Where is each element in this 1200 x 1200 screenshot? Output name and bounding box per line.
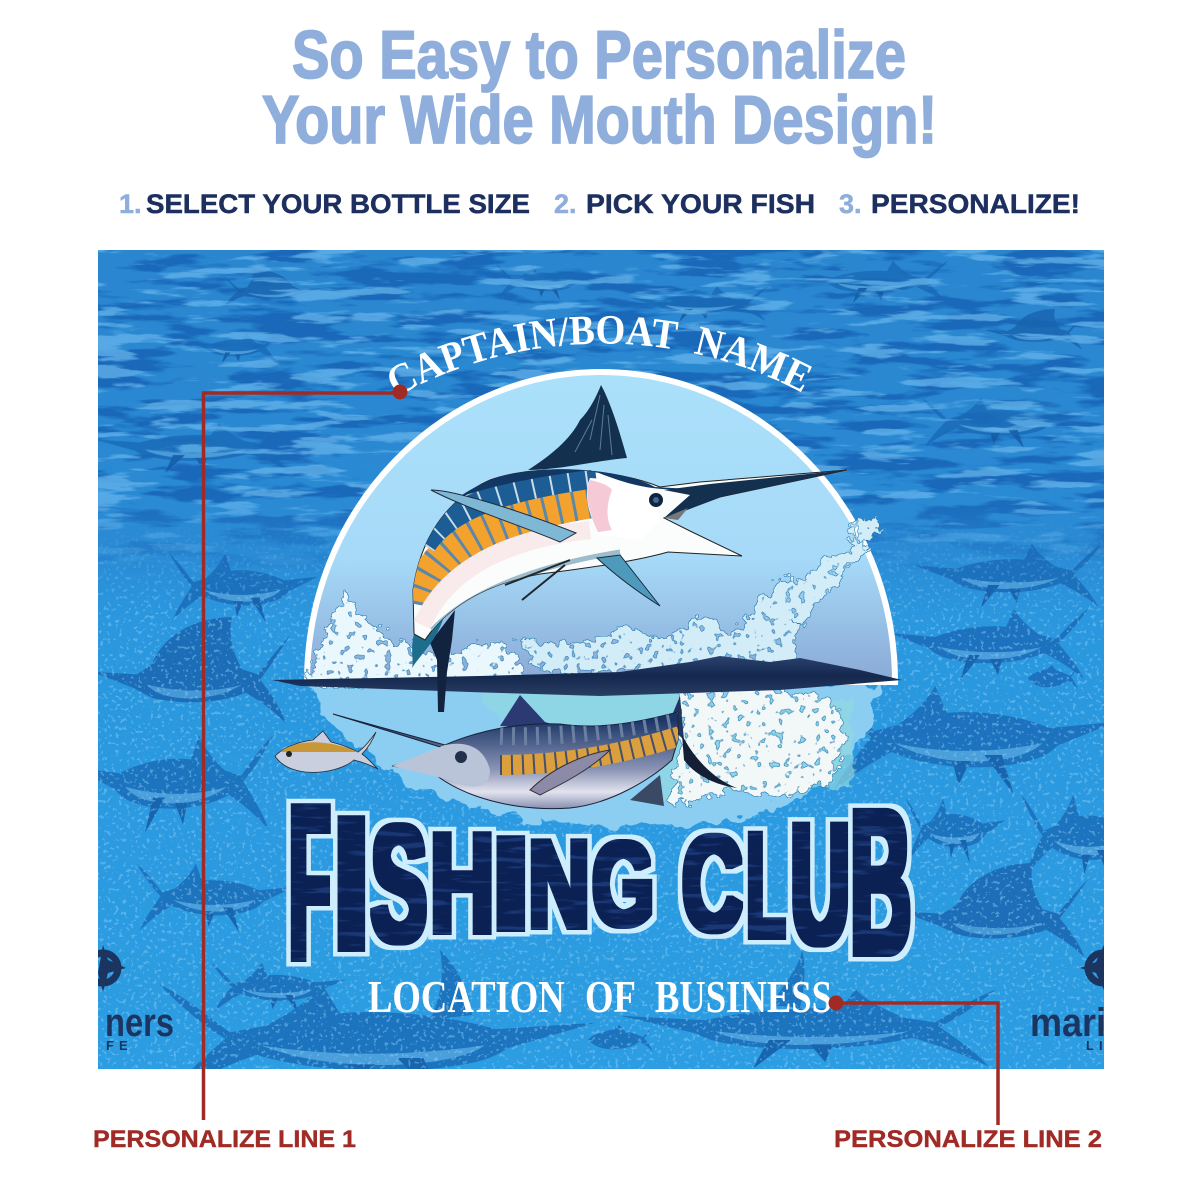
steps row: 2.: [554, 189, 577, 219]
tuna: [275, 731, 378, 772]
steps row: 1.: [119, 189, 142, 219]
fishing club lettering: L: [747, 803, 785, 970]
splash above the water: [305, 519, 885, 686]
eye: [649, 493, 663, 507]
fishing club lettering: F: [289, 759, 330, 1006]
steps row: [119, 189, 1080, 219]
light water texture: [98, 250, 1104, 562]
emblem dome: [307, 372, 895, 682]
tail: [412, 610, 455, 712]
fishing club lettering: I: [330, 778, 372, 990]
upper fish pattern: [95, 260, 1084, 473]
steps row: PICK YOUR FISH: [586, 189, 815, 219]
teal water wash: [480, 690, 850, 800]
fishing club lettering: C: [682, 808, 742, 959]
steps row: SELECT YOUR BOTTLE SIZE: [146, 189, 530, 219]
panel: bottle wrap artwork: [98, 250, 1104, 1069]
bill: [664, 470, 847, 518]
callout line 1: [204, 384, 408, 1120]
pectoral fin: [530, 750, 610, 795]
dorsal fin: [528, 385, 627, 470]
title: [262, 17, 937, 158]
fishing club lettering: S: [371, 791, 427, 976]
fishing club lettering: B: [850, 765, 911, 999]
marinerslife logo right: [1032, 945, 1104, 1050]
speckled water: [98, 532, 1104, 1069]
fishing club lettering: G: [592, 818, 654, 951]
tail fin: [673, 696, 684, 738]
underwater light patch: [312, 682, 880, 828]
foam under the water: [668, 686, 843, 802]
fishing club lettering: [286, 798, 915, 966]
steps row: 3.: [839, 189, 862, 219]
marinerslife logo left: [98, 945, 173, 1050]
label: personalize line 2: PERSONALIZE LINE 2: [834, 1126, 1102, 1153]
location of business text: LOCATION OF BUSINESS: [368, 971, 832, 1022]
title: Your Wide Mouth Design!: [262, 82, 937, 158]
marinerslife logo left: ners: [105, 1001, 174, 1045]
body: [333, 712, 678, 809]
fishing club lettering: I: [489, 810, 533, 957]
fishing club lettering: U: [790, 788, 850, 980]
fishing club lettering: H: [430, 804, 495, 963]
callout line 2: [828, 996, 998, 1125]
ventral fins: [597, 555, 660, 606]
marinerslife logo right: mari: [1030, 1001, 1106, 1045]
label: personalize line 1: PERSONALIZE LINE 1: [93, 1126, 356, 1153]
back: [462, 469, 679, 496]
marinerslife logo right: LI: [1086, 1038, 1108, 1053]
jaw: [664, 508, 688, 520]
underwater marlin: [333, 695, 737, 809]
steps row: PERSONALIZE!: [871, 189, 1080, 219]
fishing club lettering: N: [528, 814, 590, 954]
water surface line: [272, 656, 902, 696]
dorsal fin: [500, 695, 550, 726]
title: So Easy to Personalize: [292, 17, 906, 93]
ocean base: [98, 250, 1104, 1069]
flank markings: [420, 476, 620, 630]
dark water texture: [98, 250, 1104, 560]
flank stripes: [500, 718, 680, 765]
gill cover: [587, 478, 597, 518]
pectoral fin: [431, 490, 576, 542]
lower fish pattern: [98, 544, 1104, 1069]
head: [392, 744, 490, 787]
body: [413, 470, 847, 640]
marinerslife logo left: FE: [106, 1038, 133, 1053]
jumping blue marlin: [412, 385, 847, 712]
curved captain and boat name text: CAPTAIN/BOAT NAME: [389, 316, 812, 392]
